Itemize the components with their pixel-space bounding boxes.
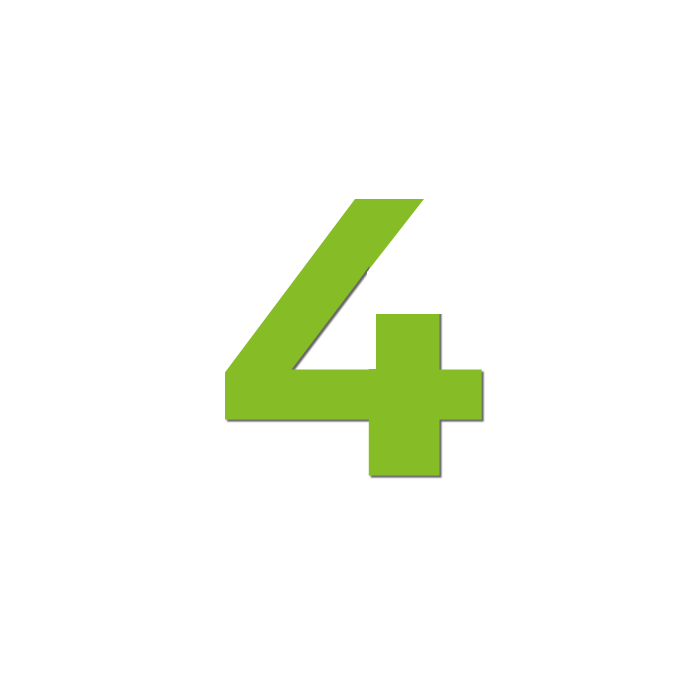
numeral 4: 4 [223, 110, 482, 556]
